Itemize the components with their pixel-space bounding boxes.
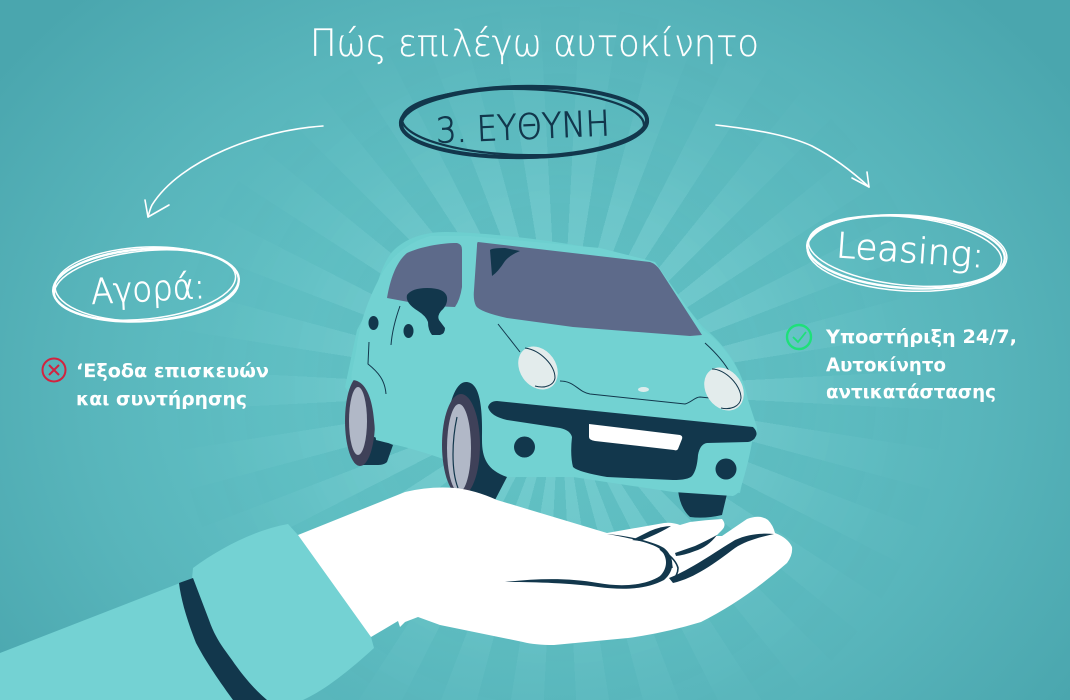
badge: 3. ΕΥΘΥΝΗ: 3. ΕΥΘΥΝΗ — [435, 104, 611, 152]
body lines — [368, 306, 730, 404]
car illustration — [345, 232, 757, 518]
right headlight — [696, 360, 752, 418]
sleeve — [0, 524, 374, 700]
text: leasing benefits — [825, 326, 1017, 403]
fog lights — [514, 436, 535, 458]
badge: Αγορά — [51, 242, 241, 328]
text: leasing benefits: Αυτοκίνητο — [826, 354, 946, 376]
badge: Αγορά: Αγορά: — [90, 267, 206, 313]
text: purchase drawback: ‘Εξοδα επισκευών — [76, 360, 269, 382]
side window — [387, 243, 462, 307]
wing mirror — [407, 288, 447, 335]
rear tyre — [345, 376, 393, 466]
car halo — [345, 232, 757, 493]
arrow: to purchase — [145, 126, 323, 217]
badge: Leasing — [805, 207, 1009, 296]
licence plate — [589, 424, 682, 450]
right front tyre — [678, 490, 727, 518]
arrow: to leasing — [716, 125, 869, 187]
side dots — [368, 316, 378, 330]
icon: green check — [787, 325, 811, 349]
title: Πώς επιλέγω αυτοκίνητο — [310, 22, 759, 65]
palm lines — [505, 526, 774, 589]
text: purchase drawback: και συντήρησης — [76, 388, 247, 410]
sleeve dark band — [179, 578, 267, 700]
left headlight — [510, 339, 566, 397]
cuff — [190, 524, 374, 700]
text: leasing benefits: αντικατάστασης — [826, 381, 996, 403]
grille — [488, 401, 757, 480]
sleeve body — [0, 583, 260, 700]
left front tyre — [442, 382, 507, 500]
icon: red cross — [42, 358, 66, 382]
badge: Leasing: Leasing: — [835, 226, 985, 276]
text: purchase drawback — [76, 360, 269, 410]
hand — [298, 488, 792, 645]
windshield — [474, 242, 702, 336]
car body — [351, 236, 757, 496]
interior mirror — [490, 248, 520, 276]
badge: 3. ΕΥΘΥΝΗ — [400, 85, 648, 159]
text: leasing benefits: Υποστήριξη 24/7, — [825, 326, 1017, 348]
hood badge — [638, 387, 649, 392]
